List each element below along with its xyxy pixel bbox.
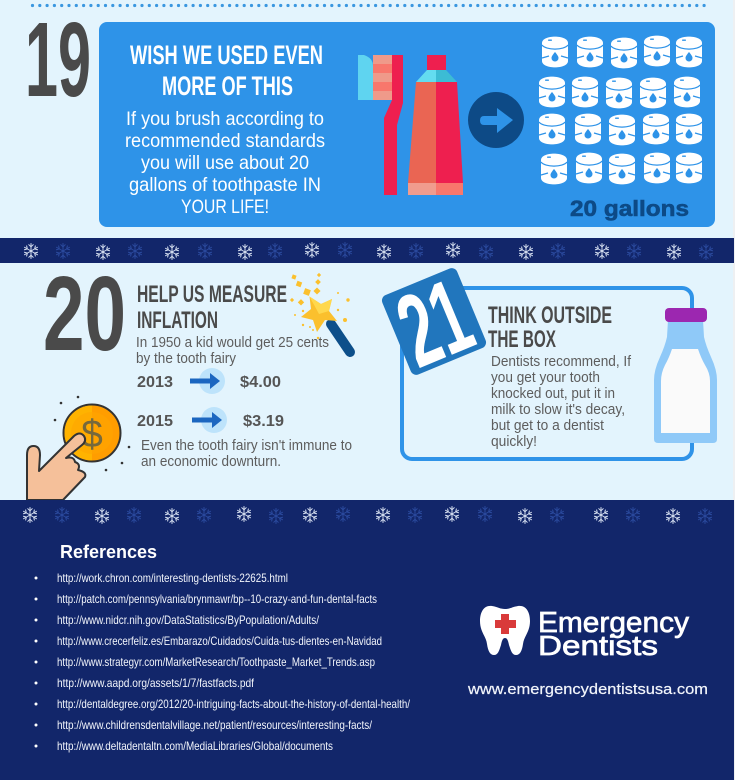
list: reference links [34,571,411,753]
row: 2015 value [137,407,284,433]
text: milk advice: quickly! [491,434,537,450]
heading: think outside the box: THE BOX [488,326,556,353]
badge: number 21: 21 [382,258,488,390]
wordmark [538,607,690,661]
panel: fact 19 toothpaste [99,22,715,227]
list: reference links: http://patch.com/pennsylvania/brynmawr/bp--10-crazy-and-fun-dental-facts [57,592,377,606]
label: 20 gallons: 20 gallons [570,196,689,221]
snowflake band bottom [22,506,713,524]
heading: wish we used even more of this: MORE OF THIS [162,71,293,101]
list: reference links: http://www.deltadentaltn.com/MediaLibraries/Global/documents [57,739,333,753]
row: 2013 value [137,368,281,394]
text: milk advice [491,354,632,450]
text: toothpaste fact: recommended standards [125,130,325,152]
logo: emergency dentists [480,606,690,661]
wordmark: Dentists [538,630,658,661]
text: milk advice: but get to a dentist [491,418,604,434]
heading: help us measure inflation: HELP US MEASURE [137,281,287,308]
icon: arrow in circle [468,92,524,148]
list: reference links: http://work.chron.com/interesting-dentists-22625.html [57,571,288,585]
heading: wish we used even more of this: WISH WE USED EVEN [130,40,323,70]
heading: wish we used even more of this [130,40,323,101]
text: website url: www.emergencydentistsusa.com [467,681,708,698]
row: 2015 value: 2015 [137,413,173,430]
number 20: 20 [43,255,126,373]
list: reference links: http://dentaldegree.org/2012/20-intriguing-facts-about-the-history-of-dental-health/ [57,697,411,711]
panel: fact 21 milk [375,255,717,459]
panel: fact 20 inflation [27,255,352,500]
text: milk advice: you get your tooth [491,370,600,386]
list: reference links: http://www.aapd.org/assets/1/7/fastfacts.pdf [57,676,255,690]
heading: help us measure inflation [137,281,287,334]
dotted top divider [32,4,711,7]
text: milk advice: Dentists recommend, If [491,354,632,370]
snowflake band top [0,238,734,263]
icon: toothbrush [358,55,403,195]
list: reference links: http://www.crecerfeliz.es/Embarazo/Cuidados/Cuida-tus-dientes-en-Navidad [57,634,382,648]
list: reference links: http://www.strategyr.com/MarketResearch/Toothpaste_Market_Trends.asp [57,655,375,669]
badge: number 21 [375,255,495,393]
text: economic downturn [141,438,352,470]
text: toothpaste fact: you will use about 20 [141,152,309,174]
list: reference links: http://www.nidcr.nih.gov/DataStatistics/ByPopulation/Adults/ [57,613,320,627]
box outline [402,288,692,459]
text: economic downturn: Even the tooth fairy isn't immune to [141,438,352,454]
icon: magic wand [290,273,350,352]
icon: milk bottle [654,308,717,443]
icon: hand tapping coin [27,396,130,500]
row: 2013 value: $4.00 [240,374,281,391]
heading: help us measure inflation: INFLATION [137,307,218,334]
text: 1950 tooth fairy: by the tooth fairy [136,351,237,367]
heading: references: References [60,542,157,562]
text: milk advice: knocked out, put it in [491,386,615,402]
number 19: 19 [25,1,91,119]
text: toothpaste fact: gallons of toothpaste IN [129,174,321,196]
text: milk advice: milk to slow it's decay, [491,402,625,418]
text: toothpaste fact: YOUR LIFE! [181,196,269,218]
text: 1950 tooth fairy: In 1950 a kid would get 25 cents [136,335,329,351]
icon: tooth with cross [480,606,530,655]
footer panel background [0,500,734,780]
row: 2015 value: $3.19 [243,413,284,430]
icon grid: 20 gallon barrels [539,36,702,184]
heading: think outside the box: THINK OUTSIDE [488,302,612,329]
icon: hand tapping coin: $ [81,413,103,456]
heading: think outside the box [488,302,612,353]
text: economic downturn: an economic downturn. [141,454,281,470]
icon: toothpaste tube [408,55,463,195]
list: reference links: http://www.childrensdentalvillage.net/patient/resources/interesting-facts/ [57,718,373,732]
text: toothpaste fact [125,108,325,218]
text: toothpaste fact: If you brush according to [126,108,324,130]
row: 2013 value: 2013 [137,374,173,391]
text: 1950 tooth fairy [136,335,329,367]
wordmark: Emergency [538,607,690,639]
